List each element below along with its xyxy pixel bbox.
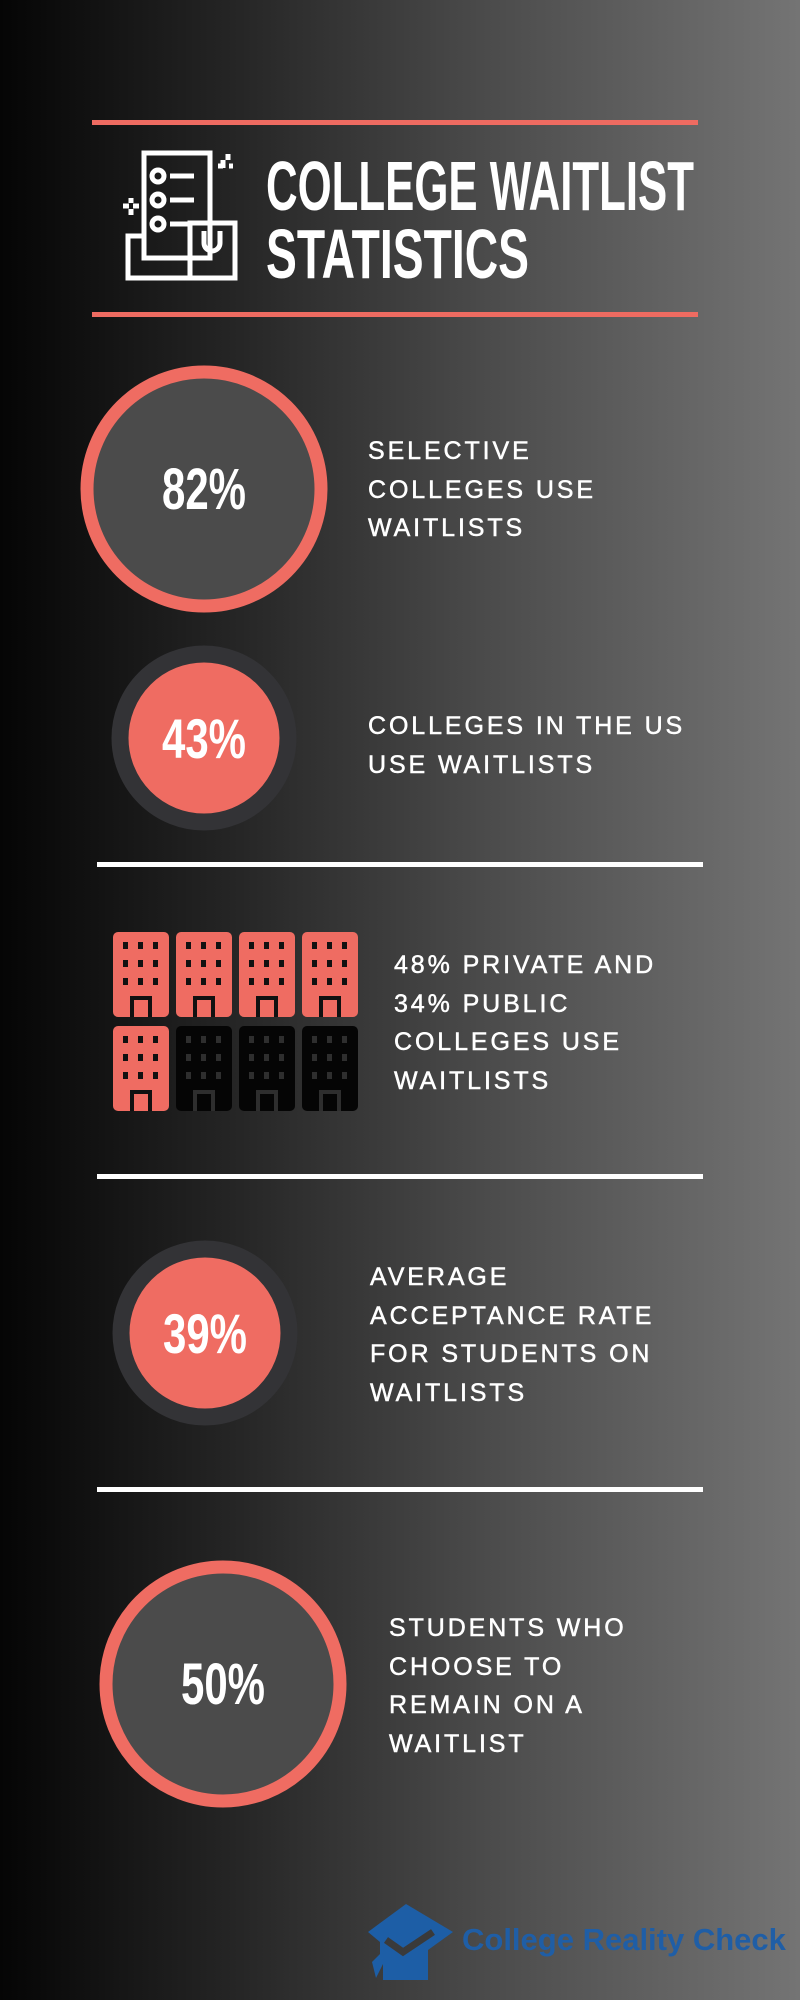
text: colleges in US: COLLEGES IN THE US: [368, 712, 685, 740]
stat 43% circle: [112, 646, 292, 830]
text: remain on waitlist: WAITLIST: [389, 1730, 527, 1758]
stat 39% circle: 39%: [163, 1302, 247, 1365]
text: colleges in US: [368, 712, 685, 778]
buildings icon grid: [113, 932, 358, 1111]
text: private and public: 48% PRIVATE AND: [394, 951, 656, 979]
stat 43% circle: 43%: [162, 707, 246, 770]
logo: College Reality Check: [368, 1904, 786, 1980]
text: private and public: WAITLISTS: [394, 1066, 551, 1094]
text: selective colleges: WAITLISTS: [368, 514, 525, 542]
text: remain on waitlist: [388, 1614, 627, 1758]
header bottom red line: [92, 312, 698, 317]
stat 82% circle: [80, 366, 328, 612]
text: selective colleges: [368, 437, 596, 542]
text: acceptance rate: ACCEPTANCE RATE: [370, 1302, 654, 1330]
icon: graduation cap check: [368, 1904, 453, 1980]
text: acceptance rate: WAITLISTS: [370, 1378, 527, 1406]
title: [266, 147, 694, 285]
text: colleges in US: USE WAITLISTS: [368, 750, 595, 778]
text: remain on waitlist: STUDENTS WHO: [389, 1614, 627, 1642]
text: acceptance rate: [370, 1263, 654, 1406]
text: acceptance rate: AVERAGE: [370, 1263, 509, 1291]
text: private and public: COLLEGES USE: [394, 1028, 622, 1056]
stat 39% circle: [112, 1240, 292, 1426]
text: acceptance rate: FOR STUDENTS ON: [370, 1340, 652, 1368]
text: remain on waitlist: CHOOSE TO: [389, 1652, 564, 1680]
text: selective colleges: COLLEGES USE: [368, 476, 596, 504]
icon: checklist with bag: [123, 150, 238, 280]
logo text: College Reality Check: [462, 1922, 786, 1957]
text: selective colleges: SELECTIVE: [368, 437, 532, 465]
header top red line: [92, 120, 698, 125]
text: remain on waitlist: REMAIN ON A: [389, 1691, 585, 1719]
stat 50% circle: [100, 1560, 346, 1808]
stat 82% circle: 82%: [162, 457, 246, 522]
stat 50% circle: 50%: [181, 1652, 265, 1717]
text: private and public: 34% PUBLIC: [394, 990, 570, 1018]
text: private and public: [394, 951, 656, 1094]
